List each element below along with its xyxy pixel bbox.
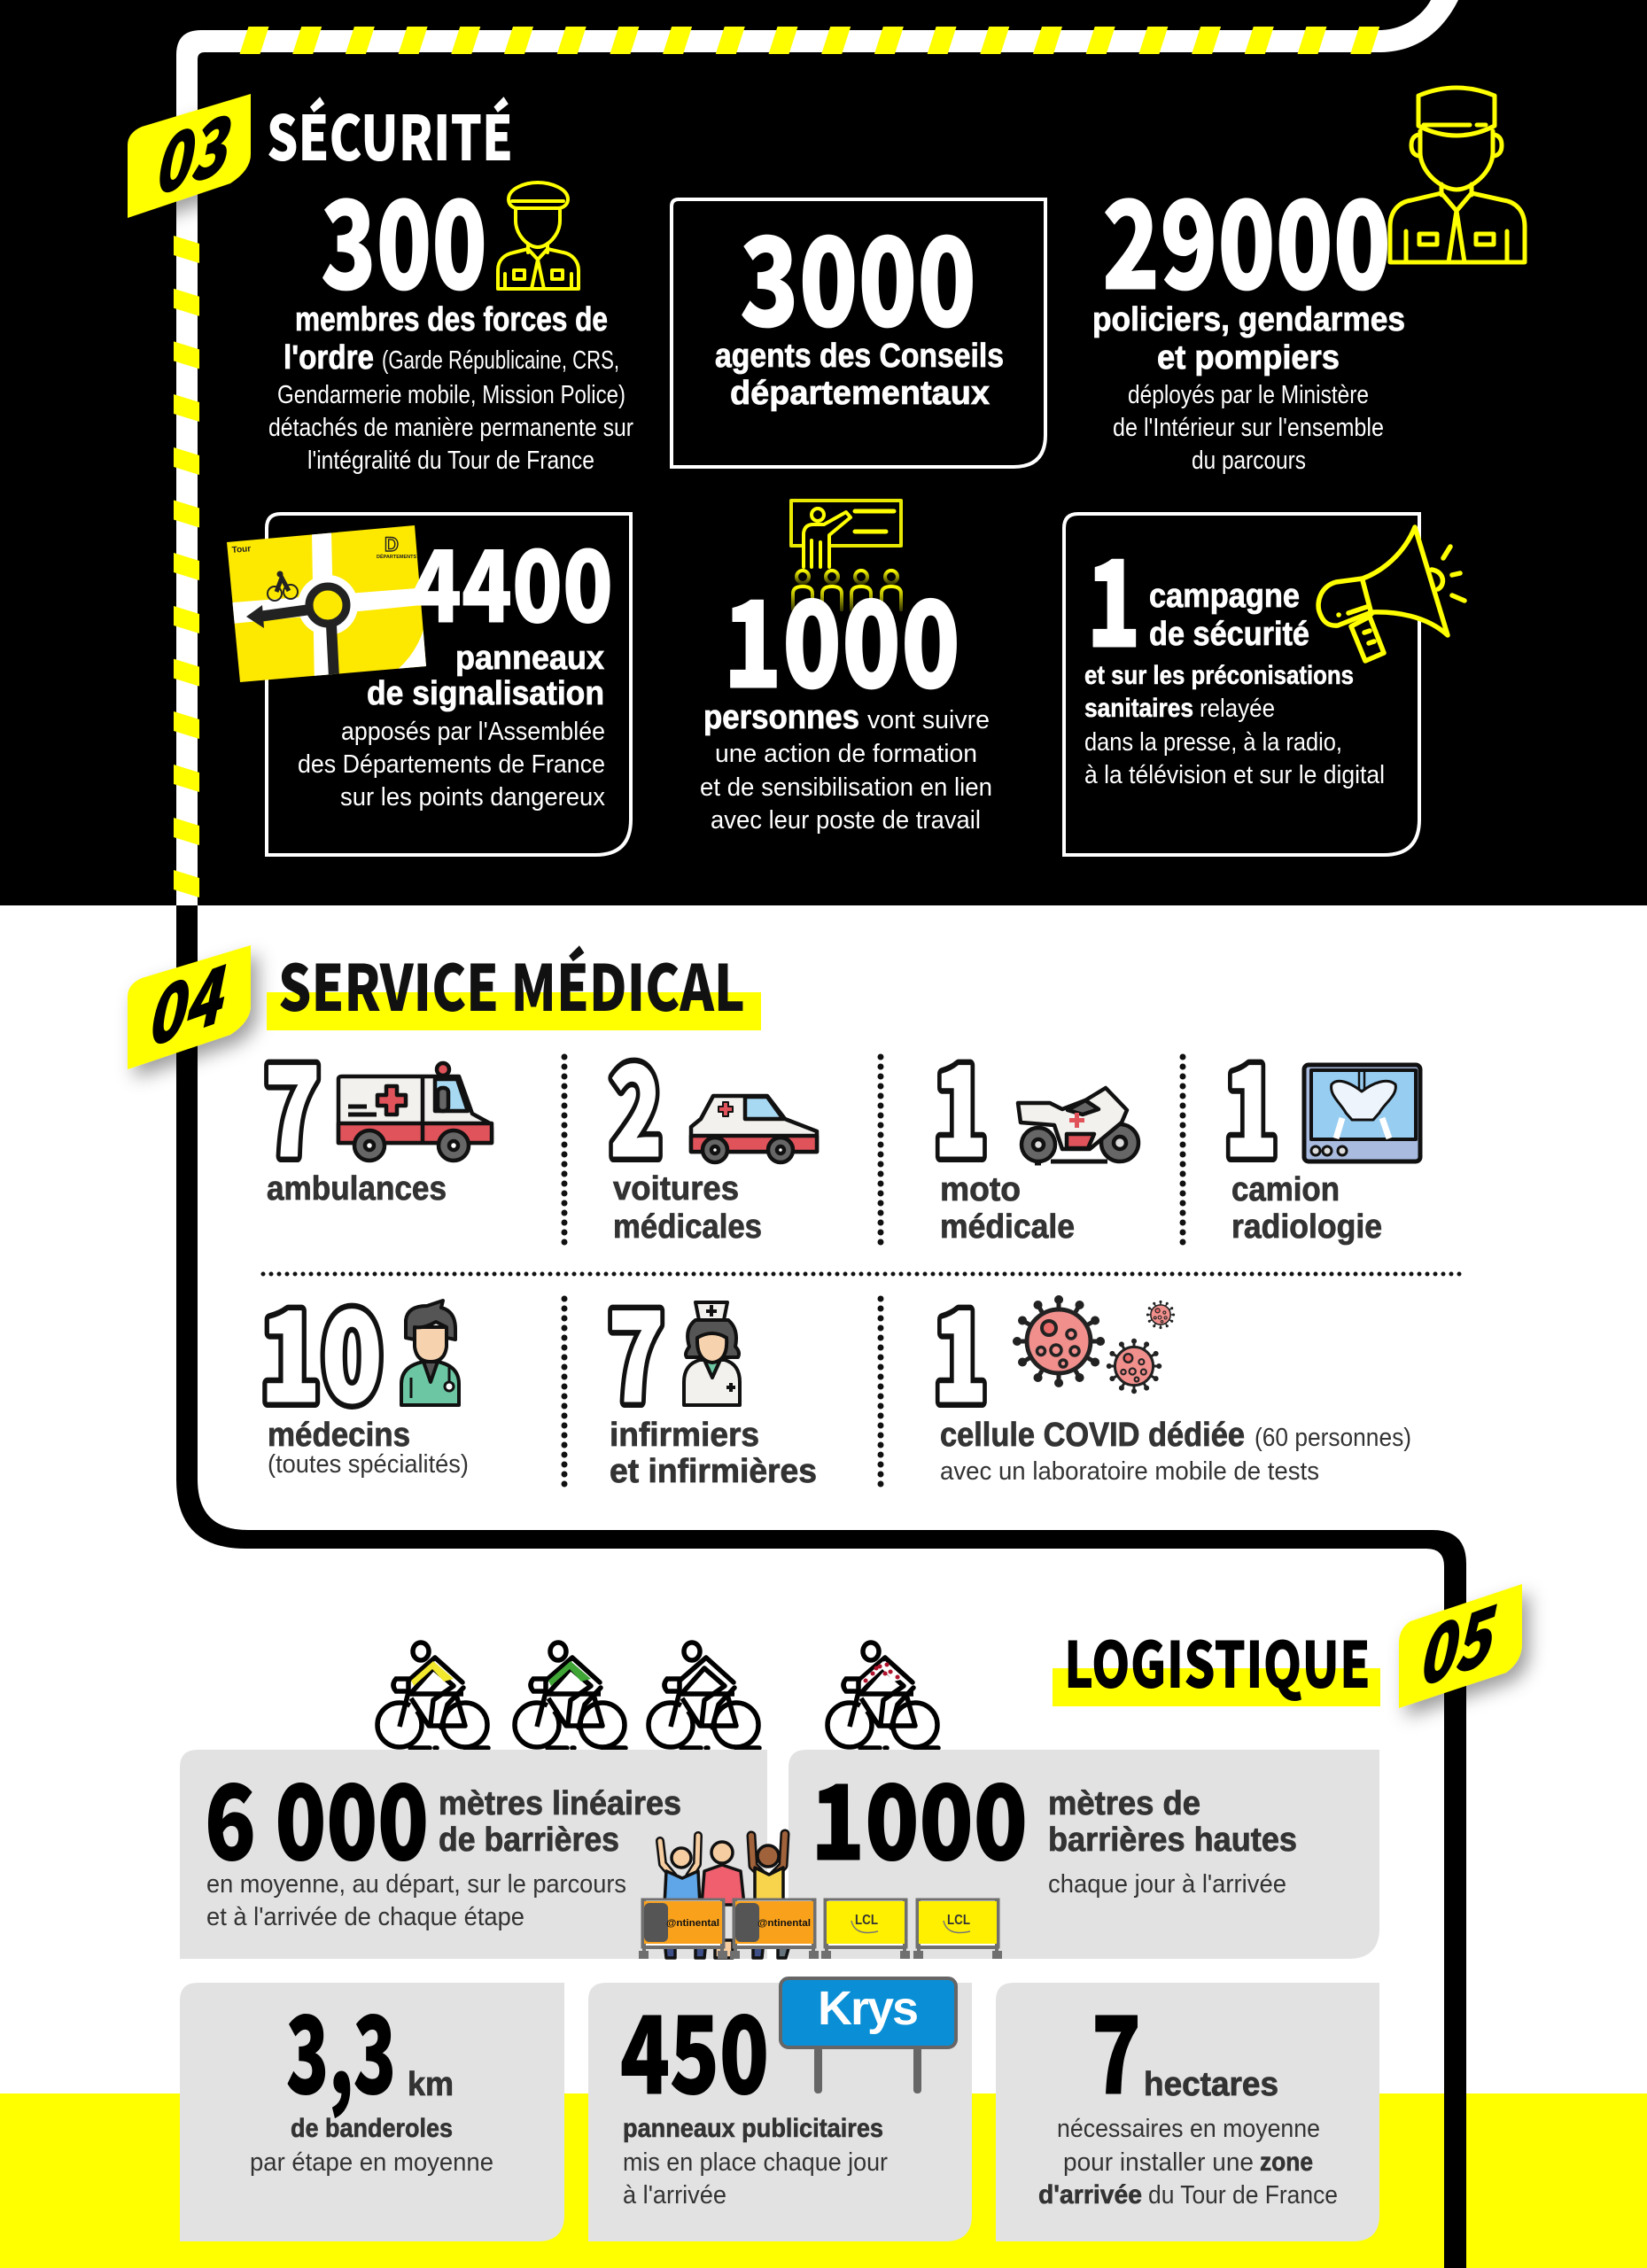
icon: road sign card: DÉPARTEMENTS — [377, 553, 416, 560]
block: 29000 policiers: du parcours — [1192, 447, 1306, 475]
panel: 1 campagne de sécurité: dans la presse, à la radio, — [1084, 728, 1342, 757]
block: 29000 policiers — [1092, 88, 1525, 475]
block: 1000 personnes — [700, 501, 992, 835]
panel: 450 panneaux publicitaires: panneaux publicitaires — [623, 2114, 883, 2143]
panel: 1000 mètres: 1000 — [811, 1739, 1028, 1890]
section 03 badge — [128, 76, 251, 221]
barrier: LCL 2: LCL — [947, 1913, 970, 1928]
route track: black line through white section — [176, 905, 1466, 2268]
icon: officer — [498, 183, 579, 289]
number 10: 10 — [260, 1256, 383, 1438]
heading: service médical: SERVICE MÉDICAL — [278, 936, 745, 1029]
icon: gendarme — [1390, 88, 1525, 262]
panel: 6000 mètres: en moyenne, au départ, sur le parcours — [206, 1870, 626, 1899]
stat: 10 médecins — [260, 1256, 469, 1479]
stat: 2 voitures médicales: médicales — [613, 1208, 762, 1246]
block: 1000 personnes: et de sensibilisation en lien — [700, 773, 992, 802]
block: 1000 personnes: vont suivre — [867, 706, 990, 734]
stat: 1 camion radiologie: radiologie — [1231, 1208, 1382, 1246]
barrier: Continental 1 — [639, 1899, 727, 1959]
panel: 7 hectares: hectares — [1144, 2066, 1278, 2103]
icons: four cyclists with jerseys — [377, 1643, 938, 1748]
block: 300 forces de l'ordre: l'ordre — [284, 339, 374, 377]
number 7: 7 — [264, 1011, 321, 1192]
block: 1000 personnes: avec leur poste de travail — [711, 806, 981, 835]
heading: sécurité: SÉCURITÉ — [267, 89, 513, 179]
icon: road sign card — [227, 525, 426, 682]
panel: 6000 mètres: mètres linéaires — [439, 1785, 681, 1822]
number 1: 1 — [933, 1256, 988, 1438]
panel: 3000 agents: agents des Conseils — [715, 338, 1004, 375]
stat: 2 voitures médicales: voitures — [613, 1170, 739, 1208]
panel: 7 hectares: d'arrivée — [1038, 2180, 1142, 2210]
panel: 3000 agents: 3000 — [740, 184, 976, 362]
panel: 3,3 km banderoles: de banderoles — [291, 2114, 453, 2143]
panel: 3000 agents: départementaux — [730, 375, 990, 412]
block: 1000 personnes: 1000 — [723, 548, 960, 723]
panel: 6000 mètres: et à l'arrivée de chaque étape — [206, 1903, 524, 1931]
panel: 7 hectares: pour installer une — [1063, 2148, 1254, 2177]
panel: 3,3 km banderoles: par étape en moyenne — [250, 2148, 493, 2177]
icon: doctor — [401, 1301, 459, 1405]
panel: 1 campagne de sécurité: sanitaires — [1084, 694, 1193, 723]
stat: 1 camion radiologie: camion — [1231, 1171, 1340, 1208]
panel: 6000 mètres — [180, 1739, 767, 1959]
yellow band at bottom — [0, 2093, 1647, 2268]
icon: training — [791, 501, 901, 610]
panel: 1 campagne de sécurité: 1 — [1086, 508, 1141, 682]
panel: 1000 mètres: chaque jour à l'arrivée — [1048, 1870, 1286, 1899]
stat: 1 cellule COVID: (60 personnes) — [1255, 1424, 1411, 1452]
number 7: 7 — [264, 1011, 321, 1192]
panel: 7 hectares: 7 — [1092, 1969, 1141, 2124]
illustration: crowd behind barriers — [639, 1834, 1002, 1959]
panel: 1 campagne de sécurité: à la télévision et sur le digital — [1084, 761, 1385, 789]
panel: 7 hectares: zone — [1260, 2148, 1313, 2177]
block: 29000 policiers: 29000 — [1102, 147, 1391, 324]
barrier: Continental 2: @ntinental — [757, 1918, 811, 1929]
panel: 7 hectares: du Tour de France — [1148, 2181, 1338, 2210]
stat: 1 cellule COVID — [933, 1256, 1411, 1486]
panel: 6000 mètres: de barrières — [439, 1821, 619, 1859]
panel: 1 campagne de sécurité: relayée — [1200, 695, 1275, 723]
stat: 7 ambulances: ambulances — [267, 1170, 447, 1208]
icon: megaphone — [1318, 527, 1464, 661]
number 1: 1 — [933, 1256, 988, 1438]
block: 29000 policiers: déployés par le Ministère — [1128, 381, 1369, 409]
icon: medical car — [691, 1096, 817, 1162]
block: 300 forces de l'ordre: l'intégralité du Tour de France — [307, 447, 594, 475]
panel: 4400 panneaux: sur les points dangereux — [340, 783, 605, 812]
black background of security section — [0, 0, 1647, 905]
panel: 1000 mètres — [789, 1739, 1379, 1959]
block: 300 forces de l'ordre: membres des forces de — [295, 301, 608, 338]
panel: 7 hectares: nécessaires en moyenne — [1057, 2115, 1320, 2143]
panel: 450 panneaux publicitaires: à l'arrivée — [623, 2181, 726, 2210]
panel: 4400 panneaux: des Départements de France — [298, 750, 605, 779]
block: 300 forces de l'ordre: Gendarmerie mobile, Mission Police) — [277, 381, 625, 409]
number 7: 7 — [608, 1256, 664, 1438]
stat: 7 ambulances — [264, 1011, 492, 1208]
panel: 6000 mètres: 6 000 — [205, 1739, 429, 1890]
number 2: 2 — [610, 1011, 663, 1192]
block: 300 forces de l'ordre — [268, 147, 633, 475]
block: 29000 policiers: et pompiers — [1157, 339, 1340, 377]
block: 300 forces de l'ordre: 300 — [321, 147, 487, 324]
panel: 4400 panneaux: de signalisation — [367, 675, 604, 712]
number 1: 1 — [933, 1011, 988, 1192]
section 04 badge: 04 — [142, 927, 239, 1072]
icon: road sign card: Tour — [231, 544, 252, 555]
stat: 10 médecins: médecins — [268, 1417, 410, 1454]
icon: motorcycle — [1018, 1088, 1138, 1163]
icon: x-ray screen — [1304, 1065, 1420, 1161]
panel: 4400 panneaux: 4400 — [411, 508, 613, 651]
icon: Krys sign — [781, 1978, 956, 2093]
number 2: 2 — [610, 1011, 663, 1192]
barrier: LCL 1: LCL — [855, 1913, 878, 1928]
stat: 1 moto médicale: moto — [940, 1171, 1021, 1208]
panel: 1 campagne de sécurité: et sur les préconisations — [1084, 661, 1354, 690]
block: 29000 policiers: de l'Intérieur sur l'ensemble — [1113, 414, 1384, 442]
panel: 4400 panneaux: panneaux — [455, 640, 604, 677]
icon: road sign card: D — [385, 533, 399, 555]
stat: 1 cellule COVID: avec un laboratoire mobile de tests — [940, 1457, 1319, 1486]
stat: 1 camion radiologie — [1224, 1011, 1420, 1246]
panel: 1 campagne de sécurité: campagne — [1149, 578, 1300, 615]
panel: 3000 agents — [672, 184, 1045, 467]
number 7: 7 — [608, 1256, 664, 1438]
heading: logistique: LOGISTIQUE — [1064, 1613, 1371, 1706]
block: 300 forces de l'ordre: (Garde Républicaine, CRS, — [382, 346, 619, 375]
stat: 1 moto médicale: médicale — [940, 1208, 1075, 1246]
route track: white and yellow striped — [174, 0, 1458, 905]
block: 1000 personnes: personnes — [703, 699, 859, 736]
panel: 1 campagne de sécurité — [1064, 508, 1464, 855]
section 05 badge: 05 — [1413, 1567, 1509, 1712]
icon: nurse — [684, 1302, 740, 1405]
panel: 1000 mètres: barrières hautes — [1048, 1821, 1297, 1859]
block: 29000 policiers: policiers, gendarmes — [1092, 301, 1405, 338]
icon: ambulance — [338, 1063, 492, 1161]
stat: 7 infirmiers: infirmiers — [610, 1417, 759, 1454]
number 2 — [610, 1011, 663, 1192]
icon: Krys sign: Krys — [818, 1982, 919, 2035]
stat: 7 infirmiers — [608, 1256, 817, 1490]
panel: 450 panneaux publicitaires: mis en place chaque jour — [623, 2148, 888, 2177]
panel: 1000 mètres: mètres de — [1048, 1785, 1200, 1822]
barrier: LCL 1 — [821, 1899, 910, 1959]
stat: 7 infirmiers: et infirmières — [610, 1453, 817, 1490]
panel: 1 campagne de sécurité: de sécurité — [1149, 616, 1309, 653]
stat: 1 cellule COVID: cellule COVID dédiée — [940, 1417, 1245, 1454]
crowd — [660, 1834, 790, 1958]
barrier: Continental 2 — [730, 1899, 819, 1959]
stat: 1 moto médicale — [933, 1011, 1138, 1246]
panel: 4400 panneaux — [221, 508, 631, 855]
number 10: 10 — [260, 1256, 383, 1438]
panel: 450 panneaux publicitaires: 450 — [620, 1969, 769, 2124]
number 1: 1 — [1224, 1011, 1278, 1192]
stat: 2 voitures médicales — [610, 1011, 817, 1246]
panel: 3,3 km banderoles: 3,3 — [286, 1969, 396, 2124]
barrier: Continental 1: @ntinental — [666, 1918, 719, 1929]
block: 1000 personnes: une action de formation — [715, 740, 977, 768]
panel: 7 hectares — [996, 1969, 1379, 2241]
number 1: 1 — [933, 1011, 988, 1192]
panel: 3,3 km banderoles: km — [408, 2066, 454, 2103]
section 03 badge: 03 — [149, 76, 245, 221]
stat: 10 médecins: (toutes spécialités) — [268, 1450, 469, 1479]
number 1: 1 — [1224, 1011, 1278, 1192]
icon: viruses — [1017, 1300, 1174, 1391]
panel: 450 panneaux publicitaires — [588, 1969, 972, 2241]
panel: 4400 panneaux: apposés par l'Assemblée — [341, 718, 605, 746]
block: 300 forces de l'ordre: détachés de manière permanente sur — [268, 414, 633, 442]
panel: 3,3 km banderoles — [180, 1969, 564, 2241]
barrier: LCL 2 — [913, 1899, 1002, 1959]
